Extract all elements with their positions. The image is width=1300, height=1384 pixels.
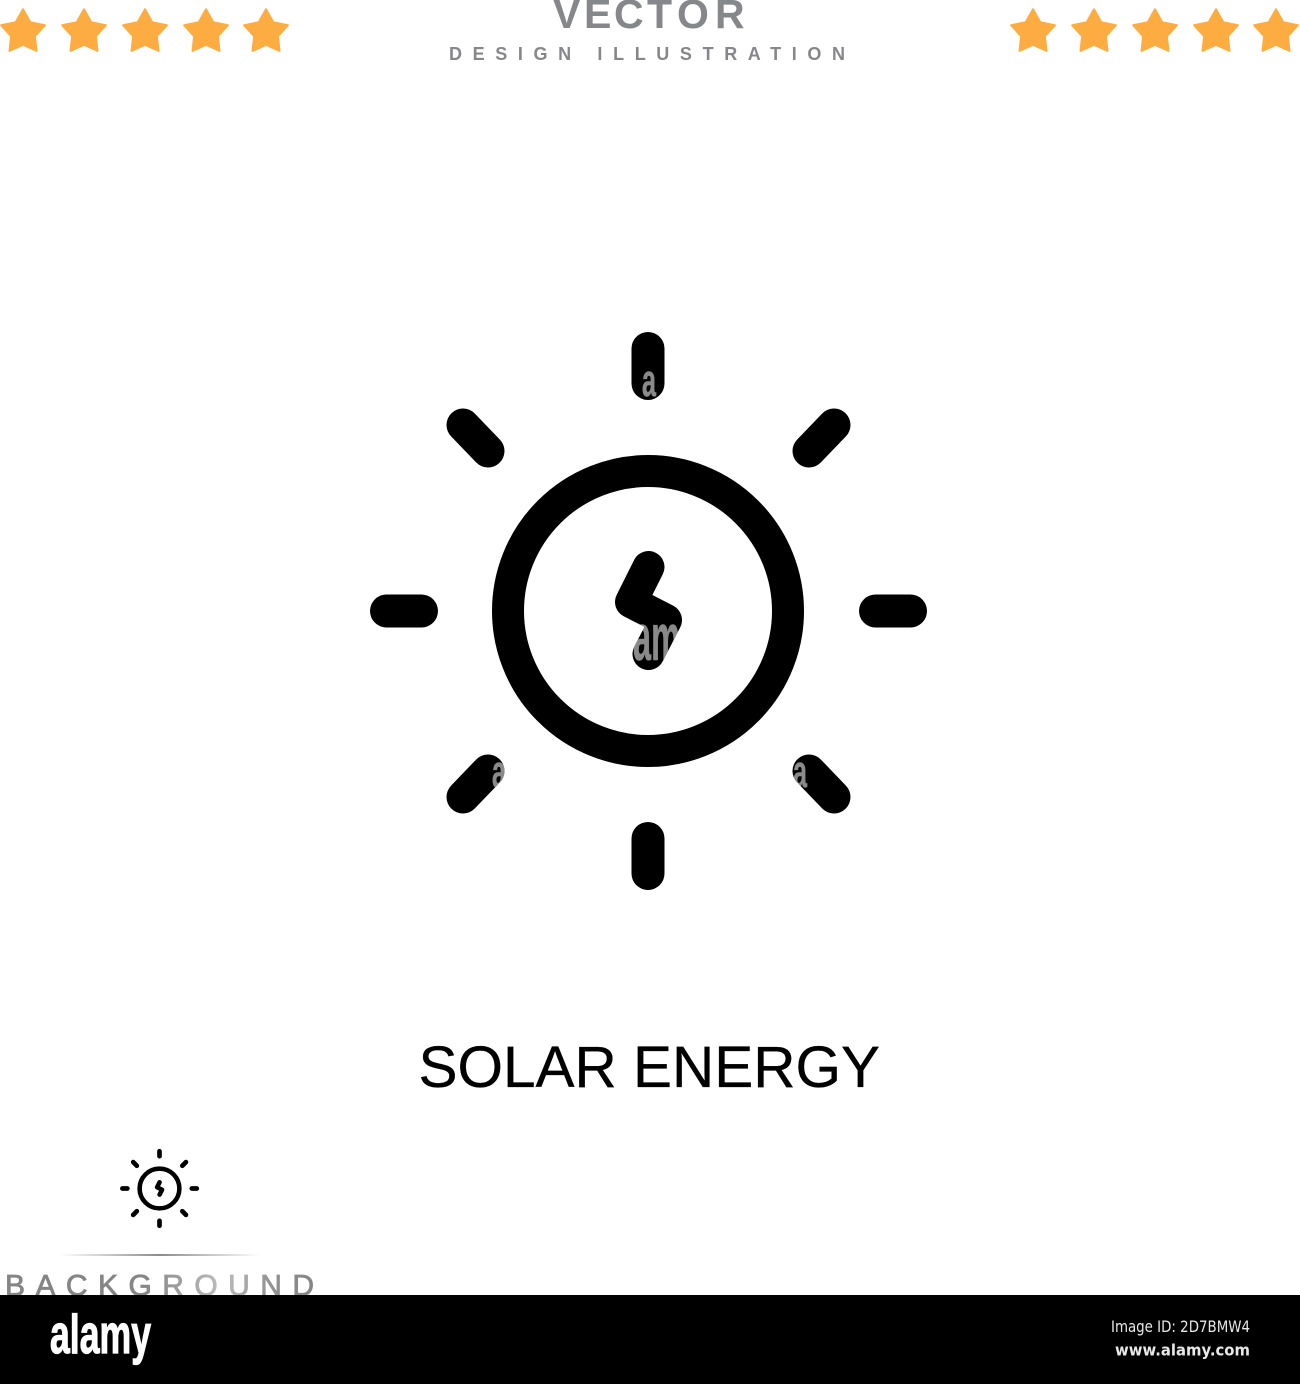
label: BACKGROUND: BACKGROUND — [5, 1270, 314, 1302]
watermark fragments over icon: am — [633, 600, 680, 674]
watermark fragments over icon: a — [793, 746, 808, 797]
alamy logo: alamy — [50, 1303, 151, 1365]
sun rays — [386, 348, 910, 874]
footer bar — [0, 1295, 1300, 1384]
divider line — [60, 1254, 260, 1256]
watermark fragments over icon: a — [642, 355, 657, 406]
watermark fragments over icon — [492, 355, 808, 797]
subheading: DESIGN ILLUSTRATION: DESIGN ILLUSTRATION — [449, 44, 845, 64]
image id: Image ID: 2D7BMW4 — [1111, 1317, 1250, 1336]
website: www.alamy.com — [1115, 1340, 1250, 1360]
icon: small sun thumbnail — [122, 1151, 197, 1226]
icon: solar energy sun with bolt — [386, 348, 910, 874]
lightning bolt — [631, 567, 666, 654]
title: SOLAR ENERGY: SOLAR ENERGY — [418, 1035, 880, 1100]
watermark fragments over icon: a — [492, 746, 507, 797]
sun circle — [508, 471, 788, 751]
left star rating — [1, 9, 288, 51]
right star rating — [1011, 9, 1298, 51]
